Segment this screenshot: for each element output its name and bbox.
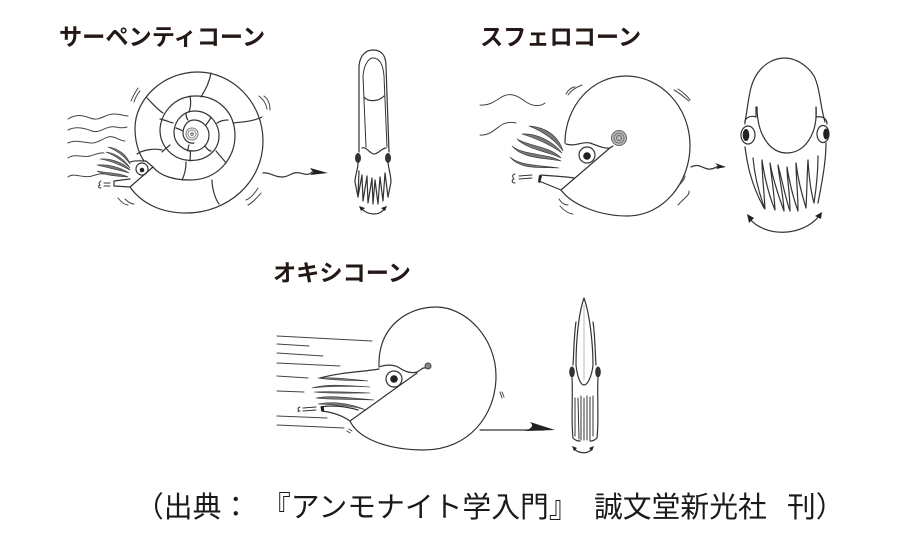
swing arrow: [749, 215, 820, 232]
motion marks: [118, 88, 270, 205]
tentacles: [575, 396, 593, 440]
illustration: oxycone side view: [277, 307, 504, 450]
caption: source: （出典：: [135, 492, 250, 524]
illustration: sphaerocone side view: [480, 76, 690, 216]
jet: [512, 174, 532, 183]
shell coil: [612, 130, 626, 146]
swing arrow: [574, 449, 592, 453]
motion marks: [559, 85, 690, 214]
head and eye: [320, 365, 425, 421]
shell: [350, 307, 496, 450]
caption: source: [135, 492, 845, 524]
arrow: oxycone speed: [480, 422, 555, 431]
tentacles: [510, 126, 563, 168]
heading: sphaerocone: スフェロコーン: [480, 24, 641, 50]
caption: source: 刊）: [787, 492, 845, 524]
illustration: serpenticone front view: [355, 50, 391, 214]
shell: [561, 76, 690, 216]
arrow: sphaerocone speed: [691, 163, 726, 169]
caption: source: 誠文堂新光社: [594, 492, 767, 524]
shell coil: [425, 363, 431, 369]
illustration: oxycone front view: [569, 298, 601, 453]
motion marks: [347, 392, 504, 433]
shell whorls: [130, 72, 263, 213]
arrow: serpenticone speed: [263, 168, 328, 177]
swing arrow: [361, 208, 385, 214]
caption: source: 『アンモナイト学入門』: [262, 492, 578, 524]
tentacles: [358, 171, 388, 204]
tentacles: [753, 156, 818, 211]
jet: [298, 407, 316, 411]
water waves: [68, 114, 128, 177]
heading: serpenticone: サーペンティコーン: [59, 24, 265, 50]
tentacles: [97, 147, 130, 177]
tentacles: [312, 378, 374, 410]
head and eye: [114, 161, 153, 187]
jet: [99, 181, 110, 188]
illustration: serpenticone side view: [68, 72, 270, 213]
speed lines: [277, 336, 372, 428]
heading: oxycone: オキシコーン: [273, 260, 411, 286]
illustration: sphaerocone front view: [741, 58, 829, 232]
water waves: [480, 95, 545, 135]
head and eye: [538, 143, 613, 190]
